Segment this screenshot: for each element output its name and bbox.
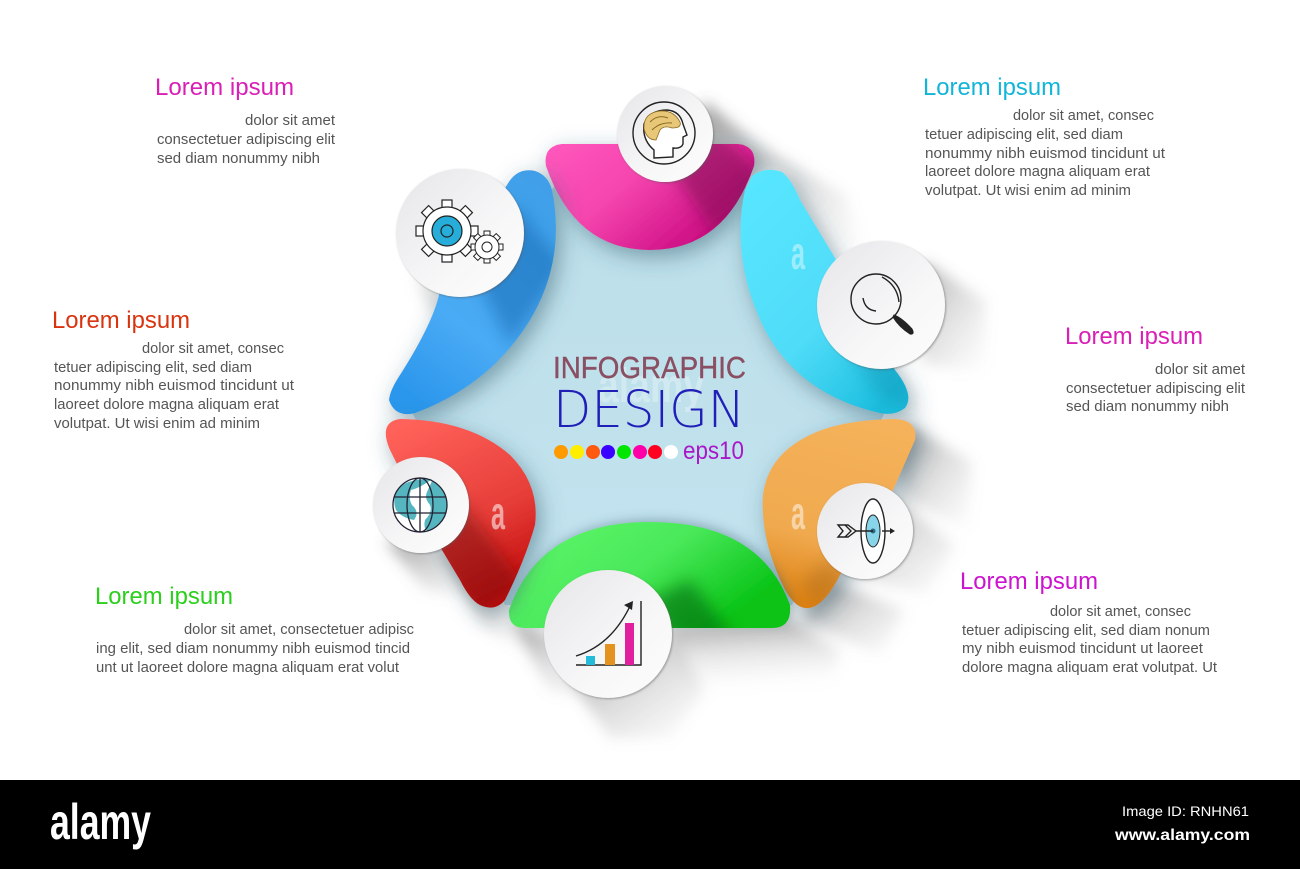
icon: bar chart (544, 570, 672, 698)
long shadows (385, 100, 985, 738)
icon: magnifier (817, 241, 945, 369)
watermark letters: a (791, 227, 805, 279)
text block: bottom left (95, 583, 414, 676)
footer credits: Image ID: RNHN61 (1122, 803, 1249, 819)
icon: globe (373, 457, 469, 553)
text block: left (52, 307, 294, 432)
watermark letters: a (941, 357, 955, 409)
text block: top left: Lorem ipsum (155, 74, 294, 101)
text block: bottom left: Lorem ipsum (95, 583, 233, 610)
text block: top left: dolor sit amet (245, 113, 335, 129)
petal: green (509, 522, 790, 628)
text block: top left (155, 74, 335, 167)
text block: bottom right (960, 568, 1217, 676)
text block: bottom right: tetuer adipiscing elit, sed diam nonum (962, 623, 1210, 639)
text block: bottom right: my nibh euismod tincidunt ut laoreet (962, 641, 1203, 657)
circle shadow on pink petal (671, 144, 754, 233)
central hexagon panel (412, 185, 885, 605)
faint watermark: alamy (598, 360, 704, 413)
footer credits (1114, 803, 1250, 844)
text block: top right: dolor sit amet, consec (1013, 108, 1154, 124)
text block: top right: laoreet dolore magna aliquam erat (925, 164, 1150, 180)
petal: red (386, 419, 536, 608)
text block: left: volutpat. Ut wisi enim ad minim (54, 416, 260, 432)
text block: top right: tetuer adipiscing elit, sed diam (925, 127, 1123, 143)
text block: right: consectetuer adipiscing elit (1066, 381, 1245, 397)
petal: cyan (740, 170, 908, 414)
colour dots (554, 445, 678, 459)
circle shadow on cyan petal (852, 364, 908, 408)
text block: left: laoreet dolore magna aliquam erat (54, 397, 279, 413)
circle shadow on green petal (654, 574, 735, 628)
DESIGN: DESIGN (553, 381, 745, 440)
text block: right (1065, 323, 1245, 415)
text block: left: tetuer adipiscing elit, sed diam (54, 360, 252, 376)
text block: left: nonummy nibh euismod tincidunt ut (54, 378, 294, 394)
text block: right: dolor sit amet (1155, 362, 1245, 378)
petal: blue (389, 170, 556, 414)
text block: top right: volutpat. Ut wisi enim ad minim (925, 183, 1131, 199)
watermark letters: a (791, 487, 805, 539)
eps10: eps10 (683, 437, 744, 465)
center title (553, 350, 746, 465)
text block: left: Lorem ipsum (52, 307, 190, 334)
text block: top left: sed diam nonummy nibh (157, 151, 320, 167)
footer bar (0, 780, 1300, 869)
text block: bottom left: ing elit, sed diam nonummy nibh euismod tincid (96, 641, 410, 657)
watermark letters: a (491, 487, 505, 539)
circle shadow on orange petal (802, 560, 841, 606)
petal: orange (763, 419, 915, 608)
circle shadow on blue petal (480, 208, 555, 343)
text block: top right: Lorem ipsum (923, 74, 1061, 101)
text block: bottom left: unt ut laoreet dolore magna aliquam erat volut (96, 660, 399, 676)
text block: bottom right: dolor sit amet, consec (1050, 604, 1191, 620)
text block: top right: nonummy nibh euismod tincidunt ut (925, 146, 1165, 162)
text block: left: dolor sit amet, consec (142, 341, 284, 357)
circle shadow on red petal (441, 504, 520, 608)
icon: brain (617, 86, 713, 182)
petal: pink (546, 144, 754, 250)
text block: bottom right: Lorem ipsum (960, 568, 1098, 595)
text block: bottom right: dolore magna aliquam erat volutpat. Ut (962, 660, 1217, 676)
footer logo: alamy (50, 794, 151, 850)
icon: target (817, 483, 913, 579)
watermark letters (491, 227, 955, 539)
text block: right: Lorem ipsum (1065, 323, 1203, 350)
text block: bottom left: dolor sit amet, consectetuer adipisc (184, 622, 414, 638)
text block: right: sed diam nonummy nibh (1066, 399, 1229, 415)
icon: gears (396, 169, 524, 297)
text block: top right (923, 74, 1165, 199)
INFOGRAPHIC: INFOGRAPHIC (553, 350, 746, 385)
text block: top left: consectetuer adipiscing elit (157, 132, 335, 148)
footer credits: www.alamy.com (1114, 827, 1250, 844)
